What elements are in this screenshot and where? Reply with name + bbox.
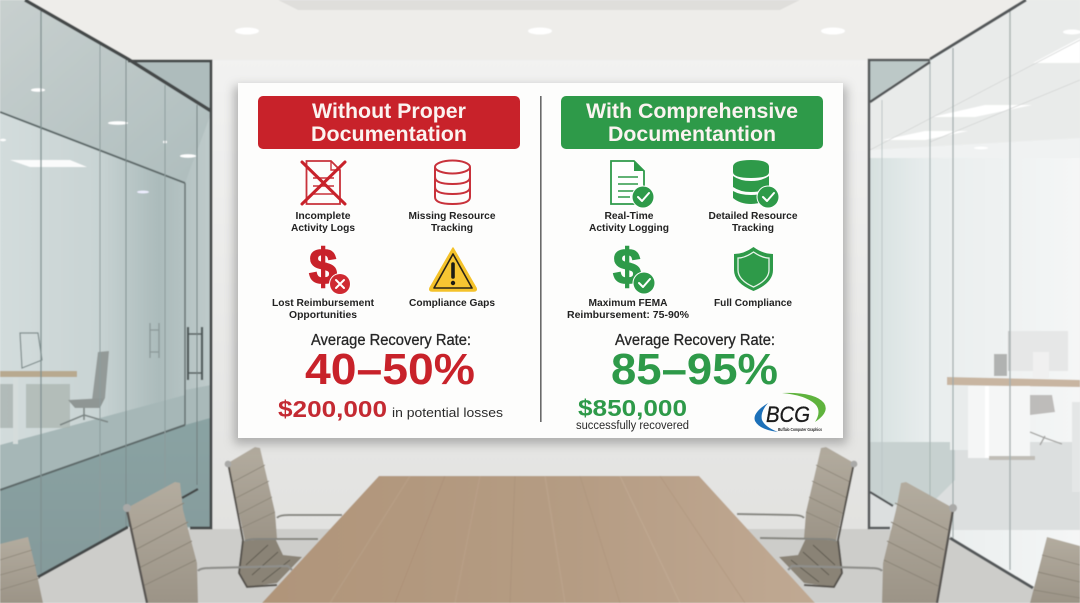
icon: checked database	[733, 160, 780, 208]
panel: with comprehensive documentation	[561, 96, 826, 432]
left desk reflection	[0, 333, 109, 444]
icon: crossed out document	[302, 161, 345, 204]
recovery rate label: Average Recovery Rate:	[615, 332, 775, 349]
label line: activity logs: Activity Logs	[291, 222, 355, 234]
icon: checked document	[611, 161, 654, 208]
panel: without proper documentation	[258, 96, 520, 422]
glass mullions	[41, 10, 197, 573]
poster panel shadow	[234, 86, 847, 444]
floor	[0, 529, 1080, 603]
main frame	[869, 0, 1033, 588]
heading: with comprehensive documentation: Documentantion	[608, 123, 776, 146]
icon: warning triangle	[430, 248, 476, 291]
label: incomplete activity logs: Incomplete	[296, 210, 351, 222]
front left chair	[123, 482, 292, 603]
icon: dollar with check	[613, 239, 656, 295]
ceiling	[0, 0, 1080, 60]
poster panel	[238, 83, 843, 438]
loss caption: in potential losses	[392, 405, 504, 420]
label: maximum fema: Maximum FEMA	[588, 297, 668, 309]
far right chair	[1030, 537, 1080, 603]
reflected frame lines	[0, 112, 185, 490]
icon: database	[435, 160, 470, 204]
door handle	[150, 323, 202, 380]
main frame	[25, 0, 211, 577]
heading: without proper documentation: Without Proper	[312, 100, 466, 123]
recovered amount: $850,000	[578, 395, 687, 421]
label line: tracking: Tracking	[431, 222, 473, 234]
right desk reflection	[947, 331, 1080, 492]
heading: without proper documentation	[258, 96, 520, 149]
icon: dollar with x: $	[309, 239, 337, 295]
front right chair	[788, 482, 957, 603]
label: full compliance: Full Compliance	[714, 297, 792, 309]
logo: BCG: BCG	[766, 402, 810, 427]
icon: dollar with check: $	[613, 239, 641, 295]
rear left chair	[225, 447, 342, 587]
label line: opportunities: Opportunities	[289, 309, 357, 321]
recovery rate value: 40–50%	[305, 345, 475, 394]
label line: activity logging: Activity Logging	[589, 222, 669, 234]
logo: BCG	[755, 393, 826, 432]
label line: reimbursement: Reimbursement: 75-90%	[567, 309, 690, 321]
recovered caption: successfully recovered	[576, 420, 689, 432]
recovery rate label: Average Recovery Rate:	[311, 332, 471, 349]
logo: BCG: Buffalo Computer Graphics	[778, 427, 822, 432]
heading: with comprehensive documentation: With Comprehensive	[586, 100, 798, 123]
label: missing resource: Missing Resource	[408, 210, 496, 222]
heading: without proper documentation: Documentation	[311, 123, 467, 146]
back wall	[212, 60, 868, 529]
icon: dollar with x	[309, 239, 351, 295]
center divider	[540, 96, 542, 422]
glass mullions	[882, 10, 1010, 570]
conference table	[262, 476, 815, 603]
recovery rate value: 85–95%	[611, 345, 778, 394]
label line: tracking: Tracking	[732, 222, 774, 234]
left glass wall	[0, 0, 212, 592]
label: detailed resource: Detailed Resource	[708, 210, 798, 222]
heading: with comprehensive documentation	[561, 96, 823, 149]
label: lost reimbursement: Lost Reimbursement	[272, 297, 374, 309]
rear right chair	[737, 447, 857, 587]
label: compliance gaps: Compliance Gaps	[409, 297, 495, 309]
loss amount: $200,000	[278, 396, 387, 422]
far left chair	[0, 537, 43, 603]
right glass wall	[868, 0, 1080, 603]
icon: shield	[734, 247, 773, 291]
label: real-time: Real-Time	[604, 210, 654, 222]
